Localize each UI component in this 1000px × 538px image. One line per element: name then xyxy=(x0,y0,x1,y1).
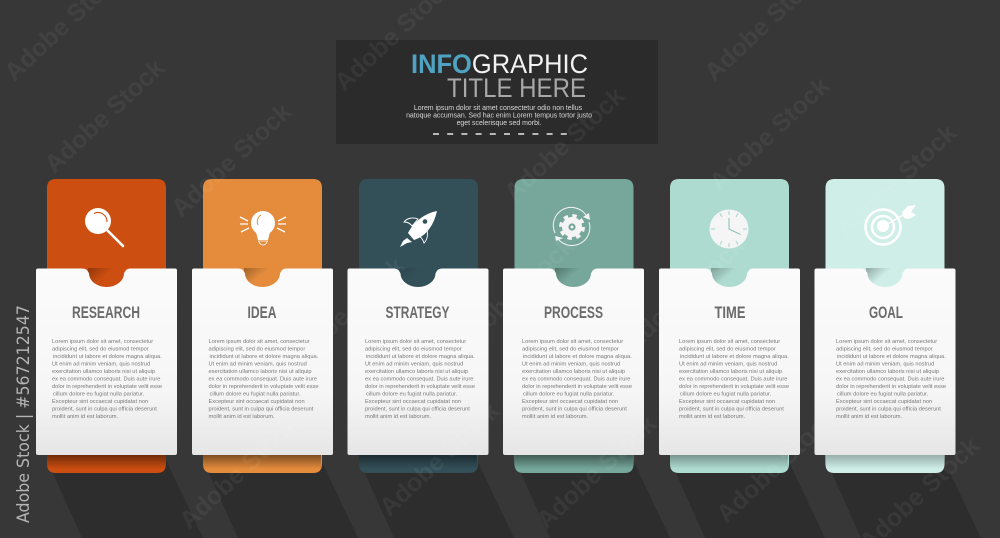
icon: target xyxy=(866,205,916,244)
notch shadow xyxy=(88,268,112,288)
body text: Lorem ipsum dolor sit amet, consectetur xyxy=(836,339,937,345)
tab shadow xyxy=(359,455,477,469)
body text: mollit anim id est laborum. xyxy=(836,414,902,420)
watermark pattern: Adobe Stock xyxy=(711,404,842,528)
panel: goal xyxy=(814,179,956,473)
body text: adipiscing elit, sed do eiusmod tempor xyxy=(836,346,933,352)
card xyxy=(503,268,644,455)
watermark pattern: Adobe Stock xyxy=(619,232,750,356)
body text: mollit anim id est laborum. xyxy=(208,414,275,420)
body text: ex ea commodo consequat. Duis aute irure xyxy=(365,376,473,382)
tab shadow xyxy=(203,455,321,469)
body text: Excepteur sint occaecat cupidatat non xyxy=(52,399,148,405)
body text: adipiscing elit, sed do eiusmod tempor xyxy=(365,346,462,352)
heading: IDEA xyxy=(248,304,277,322)
body text: Excepteur sint occaecat cupidatat non xyxy=(208,399,305,405)
body text: exercitation ullamco laboris nisi ut aliquip xyxy=(522,369,625,375)
body text: proident, sunt in culpa qui officia deserunt xyxy=(52,406,157,412)
watermark pattern: Adobe Stock xyxy=(704,72,835,196)
body text: adipiscing elit, sed do eiusmod tempor xyxy=(208,346,305,352)
body text: ex ea commodo consequat. Duis aute irure xyxy=(52,376,160,382)
notch shadow xyxy=(711,268,735,288)
body text: ex ea commodo consequat. Duis aute irure xyxy=(679,376,787,382)
body text: incididunt ut labore et dolore magna aliqua. xyxy=(210,354,319,360)
heading: GOAL xyxy=(869,304,903,322)
body text: proident, sunt in culpa qui officia deserunt xyxy=(522,406,627,412)
watermark pattern: Adobe Stock xyxy=(279,252,410,376)
watermark pattern: Adobe Stock xyxy=(831,119,962,243)
body text: proident, sunt in culpa qui officia deserunt xyxy=(679,406,784,412)
body text: ex ea commodo consequat. Duis aute irure xyxy=(836,376,944,382)
body text: dolor in reprehenderit in voluptate velit esse xyxy=(679,384,789,390)
panel: process xyxy=(503,179,644,473)
body text: dolor in reprehenderit in voluptate velit esse xyxy=(208,384,319,390)
title line 2: TITLE HERE xyxy=(447,73,586,103)
body text: proident, sunt in culpa qui officia deserunt xyxy=(365,406,470,412)
tab: time xyxy=(670,179,789,473)
body text: incididunt ut labore et dolore magna aliqua. xyxy=(366,354,475,360)
watermark pattern: Adobe Stock xyxy=(166,98,297,222)
body text: dolor in reprehenderit in voluptate velit esse xyxy=(836,384,946,390)
tab: research xyxy=(47,179,166,473)
watermark pattern: Adobe Stock xyxy=(449,232,580,356)
body text: adipiscing elit, sed do eiusmod tempor xyxy=(52,346,149,352)
body text: Ut enim ad minim veniam, quis nostrud xyxy=(836,362,934,368)
watermark pattern: Adobe Stock xyxy=(39,54,170,178)
body text: exercitation ullamco laboris nisi ut aliquip xyxy=(52,369,155,375)
body text: Lorem ipsum dolor sit amet, consectetur xyxy=(365,339,466,345)
body text: Ut enim ad minim veniam, quis nostrud xyxy=(522,362,620,368)
body text: incididunt ut labore et dolore magna aliqua. xyxy=(837,354,946,360)
body text: mollit anim id est laborum. xyxy=(365,414,431,420)
body text: Ut enim ad minim veniam, quis nostrud xyxy=(52,362,150,368)
body text: incididunt ut labore et dolore magna aliqua. xyxy=(523,354,632,360)
body text: cillum dolore eu fugiat nulla pariatur. xyxy=(837,392,928,398)
notch shadow xyxy=(555,268,579,288)
card xyxy=(192,268,333,455)
subtitle: eget scelerisque sed morbi. xyxy=(457,120,541,127)
icon: clock xyxy=(710,210,748,248)
body text: Lorem ipsum dolor sit amet, consectetur xyxy=(208,339,310,345)
heading: STRATEGY xyxy=(386,304,450,322)
title panel xyxy=(336,40,658,144)
notch shadow xyxy=(866,268,890,288)
body text: incididunt ut labore et dolore magna aliqua. xyxy=(53,354,162,360)
body text: cillum dolore eu fugiat nulla pariatur. xyxy=(210,392,301,398)
body text: Ut enim ad minim veniam, quis nostrud xyxy=(208,362,307,368)
notch shadow xyxy=(400,268,424,288)
tab shadow xyxy=(670,455,788,469)
body text: exercitation ullamco laboris nisi ut aliquip xyxy=(679,369,782,375)
tab shadow xyxy=(515,455,633,469)
body text: proident, sunt in culpa qui officia deserunt xyxy=(836,406,941,412)
panel: strategy xyxy=(348,179,488,473)
body text: exercitation ullamco laboris nisi ut aliquip xyxy=(208,369,312,375)
heading: PROCESS xyxy=(544,304,603,322)
body text: Excepteur sint occaecat cupidatat non xyxy=(679,399,775,405)
body text: cillum dolore eu fugiat nulla pariatur. xyxy=(680,392,771,398)
subtitle: natoque accumsan. Sed hac enim Lorem tempus tortor justo xyxy=(406,112,592,120)
heading: TIME xyxy=(714,304,746,322)
body text: exercitation ullamco laboris nisi ut aliquip xyxy=(365,369,468,375)
body text: dolor in reprehenderit in voluptate velit esse xyxy=(522,384,632,390)
tab: idea xyxy=(203,179,322,473)
watermark pattern: Adobe Stock xyxy=(499,82,630,206)
stock id label: Adobe Stock | #567212547 xyxy=(14,305,34,523)
watermark pattern: Adobe Stock xyxy=(174,410,305,534)
body text: Lorem ipsum dolor sit amet, consectetur xyxy=(679,339,780,345)
heading: RESEARCH xyxy=(72,304,140,322)
panel: idea xyxy=(192,179,333,473)
dashed divider xyxy=(433,133,567,135)
body text: adipiscing elit, sed do eiusmod tempor xyxy=(679,346,776,352)
tab: strategy xyxy=(359,179,478,473)
icon: rocket xyxy=(400,211,437,247)
card xyxy=(659,268,800,455)
body text: Lorem ipsum dolor sit amet, consectetur xyxy=(522,339,623,345)
title line 1: INFOGRAPHIC xyxy=(411,49,588,79)
body text: ex ea commodo consequat. Duis aute irure xyxy=(522,376,630,382)
body text: Ut enim ad minim veniam, quis nostrud xyxy=(365,362,463,368)
body text: mollit anim id est laborum. xyxy=(679,414,745,420)
long shadows xyxy=(47,460,981,538)
subtitle: Lorem ipsum dolor sit amet consectetur odio non tellus xyxy=(414,105,583,112)
icon: light bulb xyxy=(240,211,286,245)
body text: cillum dolore eu fugiat nulla pariatur. xyxy=(366,392,457,398)
body text: mollit anim id est laborum. xyxy=(522,414,588,420)
tab: process xyxy=(514,179,634,473)
panel: time xyxy=(659,179,800,473)
body text: incididunt ut labore et dolore magna aliqua. xyxy=(680,354,789,360)
body text: dolor in reprehenderit in voluptate velit esse xyxy=(365,384,475,390)
body text: ex ea commodo consequat. Duis aute irure xyxy=(208,376,317,382)
body text: mollit anim id est laborum. xyxy=(52,414,118,420)
tab: goal xyxy=(826,179,944,473)
icon: gear with arrows xyxy=(553,207,590,246)
body text: Excepteur sint occaecat cupidatat non xyxy=(836,399,932,405)
tab shadow xyxy=(47,455,166,469)
body text: exercitation ullamco laboris nisi ut aliquip xyxy=(836,369,939,375)
body text: dolor in reprehenderit in voluptate velit esse xyxy=(52,384,162,390)
card xyxy=(348,268,488,455)
body text: Excepteur sint occaecat cupidatat non xyxy=(522,399,618,405)
watermark pattern: Adobe Stock xyxy=(374,397,505,521)
body text: Excepteur sint occaecat cupidatat non xyxy=(365,399,461,405)
panel: research xyxy=(36,179,177,473)
card xyxy=(36,268,177,455)
card xyxy=(814,268,956,455)
body text: adipiscing elit, sed do eiusmod tempor xyxy=(522,346,619,352)
watermark pattern: Adobe Stock xyxy=(531,410,662,534)
notch shadow xyxy=(244,268,268,288)
icon: magnifier xyxy=(85,208,123,246)
tab shadow xyxy=(826,455,944,469)
body text: cillum dolore eu fugiat nulla pariatur. xyxy=(53,392,144,398)
body text: cillum dolore eu fugiat nulla pariatur. xyxy=(523,392,614,398)
body text: proident, sunt in culpa qui officia deserunt xyxy=(208,406,314,412)
body text: Ut enim ad minim veniam, quis nostrud xyxy=(679,362,777,368)
body text: Lorem ipsum dolor sit amet, consectetur xyxy=(52,339,153,345)
